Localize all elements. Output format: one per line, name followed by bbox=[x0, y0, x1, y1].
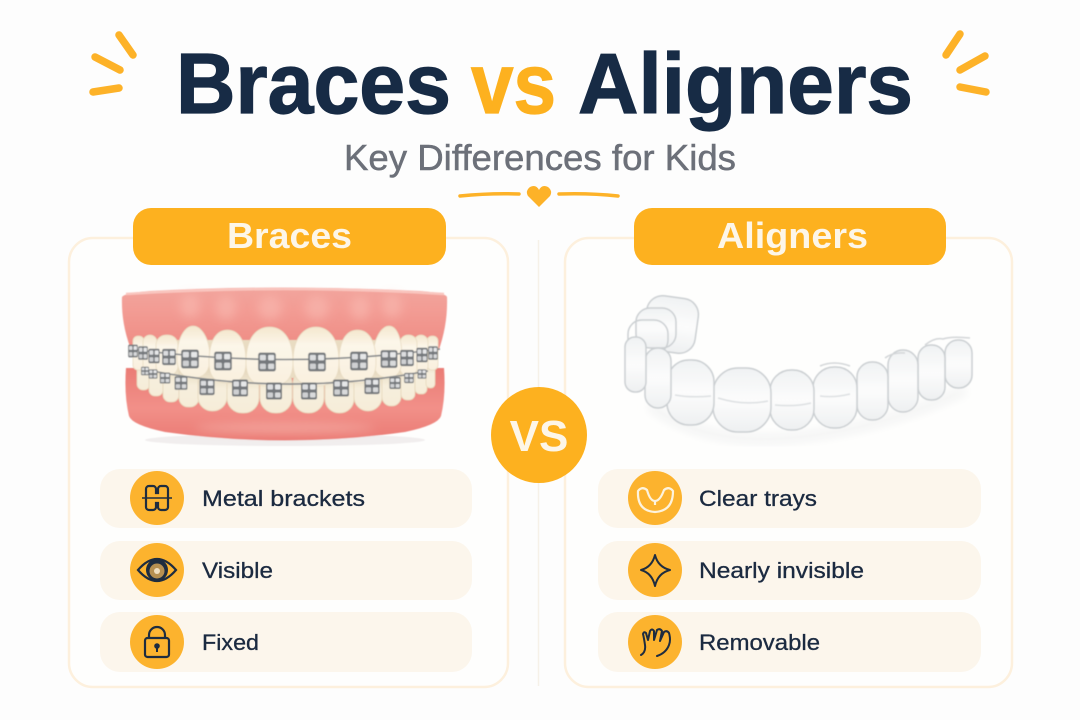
upper gum bbox=[122, 288, 447, 352]
row: fixed bbox=[100, 612, 472, 672]
panel: braces bbox=[69, 208, 508, 687]
heading pill: braces bbox=[133, 208, 446, 265]
right rear molars bbox=[945, 340, 972, 388]
title: Braces bbox=[176, 37, 451, 132]
row: nearly invisible: Nearly invisible bbox=[699, 558, 864, 583]
lower teeth bbox=[137, 360, 435, 413]
icon: sparkle bbox=[641, 555, 670, 586]
decorative sparks right bbox=[946, 34, 986, 92]
upper teeth bbox=[133, 326, 438, 386]
title bbox=[176, 37, 913, 132]
title: Aligners bbox=[578, 37, 913, 132]
lower brackets bbox=[141, 367, 426, 400]
row: metal brackets: Metal brackets bbox=[202, 486, 365, 511]
divider with heart bbox=[460, 186, 618, 207]
back of mouth bbox=[133, 340, 437, 378]
image: clear aligner tray bbox=[625, 294, 972, 439]
row: removable bbox=[598, 612, 981, 672]
icon: padlock bbox=[145, 627, 169, 657]
decorative sparks left bbox=[93, 35, 133, 92]
heading pill: aligners: Aligners bbox=[717, 215, 868, 256]
icon: tray bbox=[638, 488, 673, 512]
heading pill: braces: Braces bbox=[227, 215, 352, 256]
icon: bracket bbox=[142, 486, 172, 510]
subtitle: Key Differences for Kids bbox=[344, 137, 736, 178]
lower gum bbox=[125, 368, 445, 440]
center divider bbox=[538, 240, 540, 686]
panel: aligners bbox=[565, 208, 1012, 687]
row: fixed: Fixed bbox=[202, 630, 259, 655]
title: vs bbox=[471, 37, 556, 132]
row: clear trays bbox=[598, 469, 981, 528]
row: nearly invisible bbox=[598, 541, 981, 600]
VS badge bbox=[491, 387, 587, 483]
arch wires bbox=[130, 349, 440, 360]
icon: hand bbox=[641, 629, 670, 656]
image: teeth with braces bbox=[122, 288, 447, 446]
row: visible: Visible bbox=[202, 558, 273, 583]
row: metal brackets bbox=[100, 469, 472, 528]
heading pill: aligners bbox=[634, 208, 946, 265]
icon: eye bbox=[138, 559, 176, 581]
upper brackets bbox=[128, 345, 438, 371]
rear molars bbox=[641, 294, 701, 355]
gum highlights bbox=[180, 294, 402, 433]
row: removable: Removable bbox=[699, 630, 820, 655]
VS badge: VS bbox=[510, 412, 568, 461]
row: visible bbox=[100, 541, 472, 600]
row: clear trays: Clear trays bbox=[699, 486, 817, 511]
